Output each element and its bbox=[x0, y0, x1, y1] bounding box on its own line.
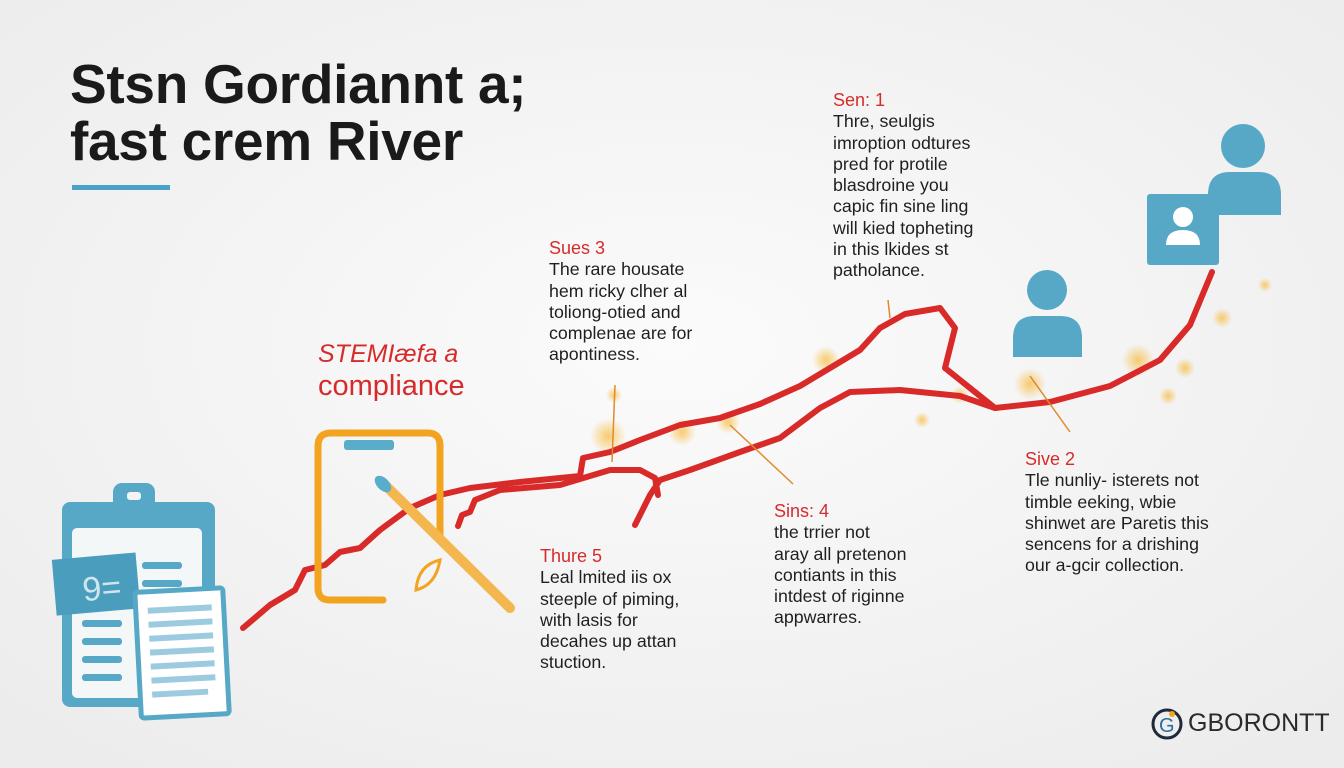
icon: blue clipboard bbox=[52, 483, 229, 718]
callout: Sins 4: aray all pretenon bbox=[774, 544, 906, 564]
callout: Sins 4: Sins: 4 bbox=[774, 501, 829, 521]
icon: person 1 bbox=[1013, 270, 1082, 357]
title bbox=[70, 53, 526, 172]
icon: orange clipboard with pen bbox=[318, 433, 510, 608]
title: fast crem River bbox=[70, 110, 463, 172]
callout: Sues 3: hem ricky clher al bbox=[549, 281, 687, 301]
logo: G bbox=[1159, 715, 1175, 737]
callout: Sins 4 bbox=[774, 501, 906, 627]
callout: Sues 3: The rare housate bbox=[549, 259, 684, 279]
callout: Sen 1: patholance. bbox=[833, 260, 925, 280]
callout: Sues 3: toliong-otied and bbox=[549, 302, 680, 322]
callout: Sive 2: timble eeking, wbie bbox=[1025, 492, 1176, 512]
callout: Sen 1: Sen: 1 bbox=[833, 90, 885, 110]
title: Stsn Gordiannt a; bbox=[70, 53, 526, 115]
icon: blue clipboard: 9= bbox=[81, 568, 123, 609]
title underline bbox=[72, 185, 170, 190]
callout: Thure 5: Leal lmited iis ox bbox=[540, 567, 671, 587]
callout: Thure 5: decahes up attan bbox=[540, 631, 676, 651]
callout: Sive 2: sencens for a drishing bbox=[1025, 534, 1199, 554]
logo bbox=[1153, 710, 1181, 738]
callout: Sins 4: appwarres. bbox=[774, 607, 862, 627]
logo text: GBORONTT bbox=[1188, 709, 1330, 737]
callout: Thure 5: stuction. bbox=[540, 652, 606, 672]
icon: person 2 bbox=[1208, 124, 1281, 215]
callout: Sues 3: complenae are for bbox=[549, 323, 692, 343]
heading: compliance: compliance bbox=[318, 370, 465, 402]
callout: Sen 1: blasdroine you bbox=[833, 175, 949, 195]
callout: Thure 5: with lasis for bbox=[540, 610, 638, 630]
callout: Sive 2 bbox=[1025, 449, 1209, 575]
heading: compliance: STEMIæfa a bbox=[318, 340, 458, 368]
callout: Sive 2: Tle nunliy- isterets not bbox=[1025, 470, 1199, 490]
callout: Sins 4: contiants in this bbox=[774, 565, 897, 585]
callout: Sen 1: will kied topheting bbox=[833, 218, 973, 238]
callout: Thure 5 bbox=[540, 546, 679, 672]
callout: Thure 5: steeple of piming, bbox=[540, 589, 679, 609]
callout: Sive 2: shinwet are Paretis this bbox=[1025, 513, 1209, 533]
callout: Sins 4: intdest of riginne bbox=[774, 586, 904, 606]
callout: Sins 4: the trrier not bbox=[774, 522, 870, 542]
callout: Sues 3: Sues 3 bbox=[549, 238, 605, 258]
callout: Sen 1: in this lkides st bbox=[833, 239, 949, 259]
callout: Sues 3: apontiness. bbox=[549, 344, 640, 364]
callout: Sen 1: imroption odtures bbox=[833, 133, 970, 153]
callout: Thure 5: Thure 5 bbox=[540, 546, 602, 566]
leader lines bbox=[612, 300, 1070, 484]
callout: Sive 2: our a-gcir collection. bbox=[1025, 555, 1184, 575]
callout: Sen 1: Thre, seulgis bbox=[833, 111, 935, 131]
callout: Sues 3 bbox=[549, 238, 692, 364]
callout: Sen 1 bbox=[833, 90, 973, 280]
callout: Sive 2: Sive 2 bbox=[1025, 449, 1075, 469]
callout: Sen 1: capic fin sine ling bbox=[833, 196, 968, 216]
glow dots bbox=[590, 278, 1272, 454]
icon: profile card bbox=[1147, 194, 1219, 265]
callout: Sen 1: pred for protile bbox=[833, 154, 948, 174]
heading: compliance bbox=[318, 340, 465, 402]
red river path bbox=[243, 272, 1212, 628]
